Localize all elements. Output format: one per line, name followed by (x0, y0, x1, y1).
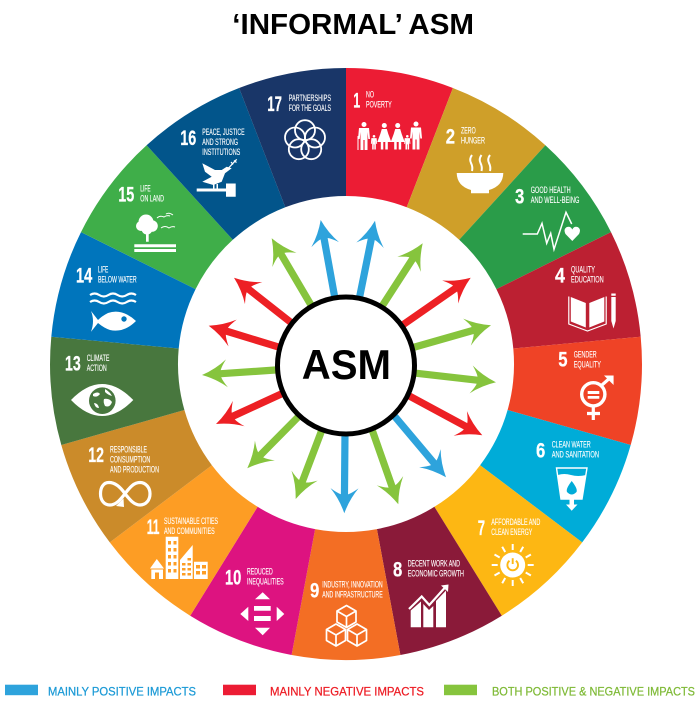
label: quality education: EDUCATION (571, 275, 604, 285)
arrow: SDG 17 positive (307, 217, 349, 300)
number 4: 4 (555, 264, 565, 288)
panel: SDG wheel (50, 68, 642, 660)
label: responsible consumption: AND PRODUCTION (110, 464, 159, 474)
icon: fish and waves (90, 294, 136, 332)
arrow: SDG 12 negative (210, 380, 289, 437)
arrow: SDG 14 negative (205, 312, 284, 361)
label: industry: INDUSTRY, INNOVATION (322, 579, 383, 589)
panel: impact arrows (201, 217, 498, 513)
arrow: SDG 6 negative (402, 383, 489, 448)
icon: heartbeat (523, 212, 580, 249)
arrow: SDG 9 positive (330, 433, 359, 513)
label: decent work: ECONOMIC GROWTH (408, 569, 464, 579)
panel: SDG 16 peace and justice (147, 88, 285, 240)
number 9: 9 (310, 578, 319, 602)
segment 15 (81, 145, 233, 289)
number 2: 2 (446, 124, 455, 148)
panel: SDG 13 climate action (50, 337, 184, 445)
label: responsible consumption (110, 444, 159, 474)
label: clean energy (491, 517, 541, 537)
title: ‘INFORMAL’ ASM (232, 9, 474, 41)
arrow: SDG 4 both (409, 312, 495, 361)
number 17: 17 (267, 92, 282, 116)
icon: eye with globe (71, 384, 133, 416)
label: good health (531, 185, 579, 205)
panel: SDG 5 gender equality (508, 337, 642, 445)
hub label: ASM (302, 341, 391, 388)
label: no poverty: NO (366, 90, 374, 100)
segment 10 (190, 507, 315, 655)
number 16: 16 (180, 126, 196, 150)
label: quality education: QUALITY (571, 265, 595, 275)
icon: dove and gavel (197, 159, 237, 197)
arrow: SDG 15 negative (225, 267, 301, 334)
panel: SDG 10 reduced inequalities (190, 507, 315, 655)
segment 2 (407, 88, 545, 240)
label: sustainable cities: AND COMMUNITIES (164, 526, 215, 536)
icon: bowl (457, 155, 503, 193)
segment 8 (377, 507, 502, 655)
panel: SDG 7 clean energy (434, 465, 582, 616)
legend swatch: positive (5, 685, 38, 695)
panel: SDG 8 decent work (377, 507, 502, 655)
legend swatch: negative (223, 685, 256, 695)
segment 12 (61, 410, 212, 542)
arrow: SDG 3 negative (395, 266, 479, 337)
icon: cubes (326, 606, 366, 646)
legend swatch: both (444, 685, 477, 695)
label: clean water (552, 440, 599, 460)
label: no poverty: POVERTY (366, 100, 392, 110)
label: clean energy: CLEAN ENERGY (491, 527, 532, 537)
label: reduced inequalities: INEQUALITIES (247, 576, 284, 586)
label: decent work: DECENT WORK AND (408, 559, 460, 569)
segment 1 (346, 68, 453, 207)
label: zero hunger: ZERO (461, 125, 476, 135)
number 8: 8 (393, 558, 402, 582)
label: responsible consumption: RESPONSIBLE (110, 444, 147, 454)
label: partnerships: PARTNERSHIPS (289, 93, 331, 103)
legend (5, 684, 695, 698)
number 5: 5 (558, 348, 568, 372)
icon: gender symbol (582, 376, 614, 420)
panel: SDG 6 clean water (480, 410, 631, 542)
label: peace and justice: PEACE, JUSTICE (202, 127, 245, 137)
label: clean energy: AFFORDABLE AND (491, 517, 541, 527)
arrow: SDG 1 positive (346, 218, 389, 301)
label: partnerships (289, 93, 331, 113)
icon: interlocking rings (285, 120, 325, 159)
label: life below water: LIFE (98, 265, 108, 275)
label: reduced inequalities (247, 566, 284, 586)
label: no poverty (366, 90, 392, 110)
label: climate action: ACTION (87, 363, 107, 373)
icon: city (150, 537, 208, 579)
number 14: 14 (76, 264, 92, 288)
hub: ASM circle (278, 297, 414, 434)
label: clean water: AND SANITATION (552, 450, 599, 460)
label: climate action: CLIMATE (87, 353, 109, 363)
label: peace and justice: INSTITUTIONS (202, 147, 240, 157)
panel: SDG 12 responsible consumption (61, 410, 212, 542)
label: good health: AND WELL-BEING (531, 195, 579, 205)
label: responsible consumption: CONSUMPTION (110, 454, 150, 464)
number 7: 7 (478, 516, 485, 540)
panel: SDG 4 quality education (496, 232, 641, 348)
number 13: 13 (65, 352, 81, 376)
segment 7 (434, 465, 582, 616)
label: gender equality: GENDER (574, 349, 597, 359)
arrow: SDG 5 both (413, 359, 498, 396)
segment 17 (239, 68, 346, 207)
icon: rising chart (409, 584, 448, 627)
label: quality education (571, 265, 604, 285)
label: clean water: CLEAN WATER (552, 440, 591, 450)
label: peace and justice (202, 127, 245, 157)
segment 11 (110, 465, 258, 616)
number 12: 12 (88, 443, 104, 467)
label: good health: GOOD HEALTH (531, 185, 571, 195)
segment 14 (51, 232, 196, 348)
number 11: 11 (147, 515, 159, 539)
label: life on land (140, 184, 164, 204)
arrow: SDG 16 both (260, 231, 323, 313)
label: life below water (98, 265, 137, 285)
panel: SDG 15 life on land (81, 145, 233, 289)
number 15: 15 (118, 183, 134, 207)
segment 5 (508, 337, 642, 445)
segment 4 (496, 232, 641, 348)
arrow: SDG 11 both (237, 405, 310, 478)
panel: SDG 9 industry (292, 529, 400, 660)
number 3: 3 (515, 184, 524, 208)
number 6: 6 (536, 439, 545, 463)
label: partnerships: FOR THE GOALS (289, 103, 331, 113)
panel: SDG 3 good health (459, 145, 611, 289)
label: climate action (87, 353, 109, 373)
arrow: SDG 10 both (283, 425, 335, 504)
label: gender equality: EQUALITY (574, 359, 601, 369)
label: peace and justice: AND STRONG (202, 137, 238, 147)
number 10: 10 (225, 565, 241, 589)
label: sustainable cities: SUSTAINABLE CITIES (164, 516, 218, 526)
icon: infinity loop (100, 482, 150, 507)
panel: SDG 14 life below water (51, 232, 196, 348)
label: decent work (408, 559, 464, 579)
label: sustainable cities (164, 516, 218, 536)
label: industry (322, 579, 383, 599)
segment 6 (480, 410, 631, 542)
label: industry: AND INFRASTRUCTURE (322, 589, 383, 599)
segment 9 (292, 529, 400, 660)
label: zero hunger (461, 125, 485, 145)
icon: book and pencil (569, 294, 616, 331)
legend text: positive: MAINLY POSITIVE IMPACTS (48, 684, 196, 698)
icon: family (358, 122, 422, 150)
icon: water glass (556, 468, 587, 511)
number 1: 1 (353, 88, 360, 112)
label: gender equality (574, 349, 601, 369)
panel: SDG 17 partnerships (239, 68, 346, 207)
arrow: SDG 13 both (201, 356, 280, 389)
panel: SDG 2 zero hunger (407, 88, 545, 240)
legend text: negative: MAINLY NEGATIVE IMPACTS (270, 684, 424, 698)
label: zero hunger: HUNGER (461, 135, 485, 145)
segment 16 (147, 88, 285, 240)
label: reduced inequalities: REDUCED (247, 566, 273, 576)
label: life on land: LIFE (140, 184, 151, 194)
icon: inequality arrows (240, 592, 284, 635)
label: life below water: BELOW WATER (98, 275, 137, 285)
arrow: SDG 7 positive (382, 406, 457, 486)
icon: tree and birds (134, 213, 176, 252)
label: life on land: ON LAND (140, 194, 164, 204)
arrow: SDG 2 both (370, 236, 434, 315)
segment 3 (459, 145, 611, 289)
segment 13 (50, 337, 184, 445)
arrow: SDG 8 both (359, 424, 412, 509)
icon: sun power (492, 544, 534, 586)
panel: SDG 11 sustainable cities (110, 465, 258, 616)
panel: SDG 1 no poverty (346, 68, 453, 207)
